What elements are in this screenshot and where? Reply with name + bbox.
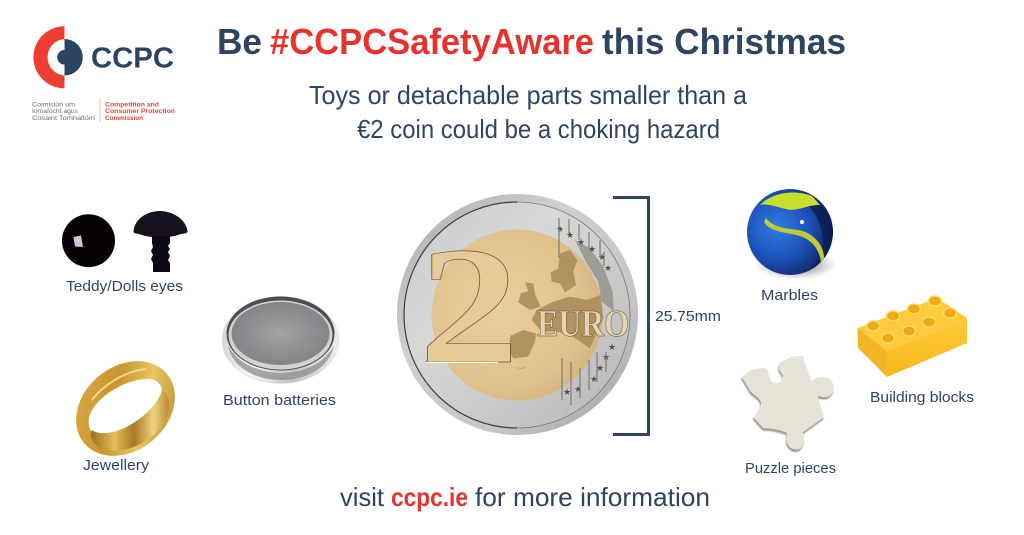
logo: CCPC [32,26,175,122]
subtitle [309,80,748,144]
icon: puzzle piece [741,356,834,452]
label: Jewellery: Jewellery [83,457,150,474]
coin stars: ★ [608,342,616,352]
footer call to action: visit [340,482,385,512]
coin stars: ★ [577,237,585,247]
icon: teddy eye with screw back [133,211,188,272]
subtitle: €2 coin could be a choking hazard [357,114,720,144]
logo Irish name: Coimisiún um [32,102,76,108]
label: Teddy/Dolls eyes: Teddy/Dolls eyes [66,278,183,295]
dimension bracket [613,198,648,434]
icon: button battery [222,296,339,384]
title: this Christmas [602,21,846,62]
coin stars: ★ [563,387,571,397]
coin stars: ★ [602,352,610,362]
coin stars: ★ [598,252,606,262]
icon: teddy eye round [62,214,115,267]
logo Irish name [32,102,95,122]
icon: building block [858,296,967,377]
coin stars: ★ [556,224,564,234]
footer call to action: ccpc.ie [391,482,468,512]
coin numeral 2: 2 [419,213,519,399]
2 euro coin [397,194,638,435]
coin gold centre [432,230,602,400]
label: Building blocks: Building blocks [870,389,974,406]
logo English name: Consumer Protection [105,108,175,115]
logo mark [33,26,83,88]
coin stars: ★ [588,244,596,254]
coin stars: ★ [574,384,582,394]
title: Be [217,21,262,62]
logo English name: Commission [105,115,143,122]
coin outer ring [397,194,638,435]
coin stars: ★ [604,263,612,273]
label: Marbles: Marbles [761,287,818,304]
coin stars: ★ [590,374,598,384]
coin vertical lines [559,218,606,405]
logo Irish name: Iomaíocht agus [32,108,79,115]
coin stars: ★ [566,230,574,240]
logo English name: Competition and [105,102,159,108]
label: Puzzle pieces: Puzzle pieces [745,460,836,477]
title: #CCPCSafetyAware [270,21,594,62]
footer call to action [340,482,710,512]
coin stars [556,224,616,397]
label: 25.75mm: 25.75mm [655,308,721,325]
coin map of Europe [508,240,614,369]
icon: marble [747,189,834,278]
subtitle: Toys or detachable parts smaller than a [309,80,748,110]
title [217,21,846,62]
coin stars: ★ [596,363,604,373]
coin EURO lettering: EURO [537,303,629,345]
icon: gold ring [57,342,194,475]
label: Button batteries: Button batteries [223,392,336,409]
footer call to action: for more information [475,482,710,512]
block studs [866,296,956,343]
logo wordmark: CCPC [91,42,174,74]
logo Irish name: Cosaint Tomhaltóirí [32,115,95,122]
logo English name [105,102,175,122]
